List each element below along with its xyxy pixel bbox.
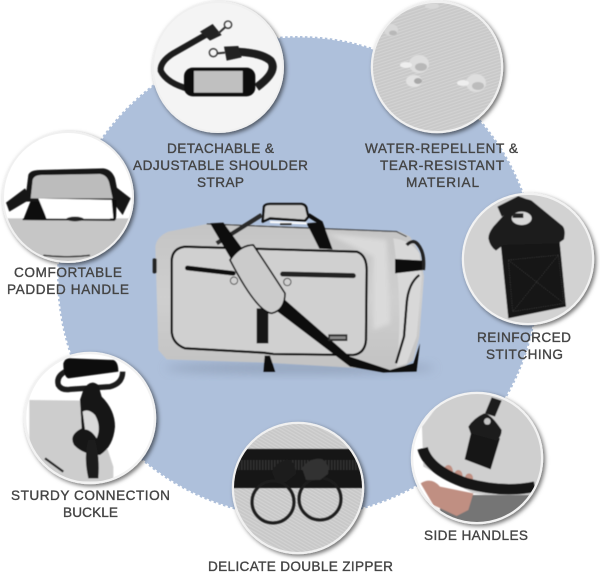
photo: stitched strap [464,195,592,323]
shoulder strap [257,308,268,343]
zippers [187,268,233,273]
panel: water-repellent material [365,0,518,190]
label: handle [7,265,129,297]
circle frame [463,194,593,324]
label [328,334,347,341]
circle frame [412,393,542,523]
bag shadow [165,362,435,374]
hand [421,465,473,516]
panel: reinforced stitching [460,190,597,362]
label: buckle [11,488,170,520]
panel: double zipper [208,420,393,573]
panel: shoulder strap [133,2,308,190]
pocket [172,247,367,355]
photo: buckle [29,358,123,482]
label: buckle: STURDY CONNECTION [11,488,170,503]
panel: connection buckle [11,353,170,520]
side parts [395,259,424,273]
label: material: WATER-REPELLENT & [365,141,518,156]
label: strap [133,141,308,190]
label: material [365,141,518,190]
bag artwork [153,204,424,373]
label: strap: DETACHABLE & [167,141,274,156]
label: material: MATERIAL [406,175,479,190]
photo: handle [6,168,133,263]
label: stitching [477,330,571,362]
photo: fabric with droplets [373,3,501,131]
label: strap: STRAP [197,175,244,190]
label: handle: PADDED HANDLE [7,282,129,297]
panel: side handles [412,393,547,543]
label: stitching: STITCHING [486,347,563,362]
label: material: TEAR-RESISTANT [380,158,504,173]
circle frame [153,2,283,132]
label: handle: COMFORTABLE [14,265,122,280]
background circle [57,36,539,518]
circle frame [25,353,155,483]
label: side handles: SIDE HANDLES [424,528,528,543]
photo: side handle [421,393,547,527]
photo: zipper [234,424,362,552]
handle top [263,204,308,222]
label: strap: ADJUSTABLE SHOULDER [133,158,308,173]
label: stitching: REINFORCED [477,330,571,345]
circle frame [3,132,133,262]
panel: central duffel bag [153,204,435,374]
circle frame [233,423,363,553]
panel: padded handle [3,132,133,297]
circle frame [372,2,502,132]
label: buckle: BUCKLE [63,505,118,520]
photo: strap [161,21,273,96]
